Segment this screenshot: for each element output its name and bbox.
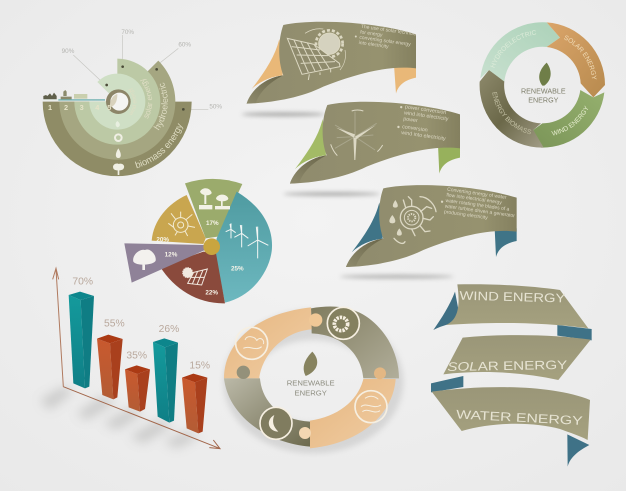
pie labels: 12% xyxy=(165,251,178,258)
fold xyxy=(252,39,283,89)
tip dots xyxy=(105,65,185,111)
bar: 35% xyxy=(125,365,150,412)
centre label xyxy=(287,379,335,398)
ribbon banners xyxy=(431,284,592,467)
centre leaf xyxy=(304,352,317,376)
level numbers and skyline: 1 xyxy=(48,103,52,112)
ring labels: hydroelectric xyxy=(154,82,168,130)
ring labels: biomass energy xyxy=(134,123,184,168)
bar: 26% xyxy=(153,338,178,423)
description text: producing electricity xyxy=(444,209,489,221)
arrow labels: HYDROELECTRIC xyxy=(490,30,536,68)
banner: wind energy xyxy=(433,284,592,340)
segment: purple 12% xyxy=(124,243,206,283)
axes xyxy=(53,268,220,449)
ribbon body xyxy=(290,102,460,184)
bar labels: 35% xyxy=(126,350,147,361)
banner: water energy: WATER ENERGY xyxy=(456,407,583,428)
description text: for energy xyxy=(360,29,383,39)
description text: wind into electricity xyxy=(404,110,449,123)
arrow labels xyxy=(490,30,597,136)
hub xyxy=(203,238,220,255)
shadow xyxy=(242,112,325,116)
icon: top-left badge xyxy=(236,327,268,359)
centre label xyxy=(521,88,566,105)
description text: power conversion xyxy=(404,104,447,116)
piece: top left xyxy=(224,307,312,378)
shadow xyxy=(283,192,380,196)
description text: water turbine driven a generator xyxy=(444,204,515,219)
leader lines and percentages: 70% xyxy=(121,29,134,36)
bar labels: 15% xyxy=(189,361,210,372)
pie labels: 22% xyxy=(205,290,218,297)
bar: 55% xyxy=(97,335,123,399)
ring: solar xyxy=(74,59,160,145)
ring labels xyxy=(128,79,184,168)
bar: 70% xyxy=(69,292,94,388)
banner: water energy xyxy=(432,387,590,467)
icon: wind turbine xyxy=(331,110,383,160)
level numbers and skyline: 5 xyxy=(107,103,111,112)
leader lines and percentages: 90% xyxy=(62,48,75,55)
icon: top-right badge xyxy=(327,307,359,339)
ribbon: solar text xyxy=(242,22,426,116)
circular arrows diagram xyxy=(480,22,605,148)
ribbon: water text xyxy=(340,185,518,279)
banner: wind energy: WIND ENERGY xyxy=(459,289,566,305)
pie labels: 17% xyxy=(206,220,219,227)
description text xyxy=(397,106,448,141)
description text: power xyxy=(403,116,418,124)
bar labels: 26% xyxy=(159,324,179,335)
description text xyxy=(441,187,515,220)
centre label: RENEWABLE xyxy=(521,88,566,96)
description text: Converting energy of water xyxy=(447,187,507,201)
leader lines and percentages: 50% xyxy=(209,104,222,111)
segment: brown 22% xyxy=(160,252,225,303)
arrow: solar energy xyxy=(547,22,605,97)
segment: green 17% xyxy=(185,179,242,238)
centre hub xyxy=(106,89,131,114)
pie chart xyxy=(124,179,272,303)
pie labels: 25% xyxy=(231,266,244,273)
centre label: RENEWABLE xyxy=(287,379,335,388)
description text xyxy=(354,24,416,49)
icon: water wheel xyxy=(389,197,436,243)
ring: biomass xyxy=(43,102,192,176)
ribbon: wind text xyxy=(283,102,460,196)
leader lines and percentages xyxy=(62,29,222,111)
arrow: energy biomass xyxy=(480,70,544,148)
ribbon tail xyxy=(394,65,416,94)
piece: bottom right xyxy=(310,379,396,448)
piece: bottom left xyxy=(224,378,310,447)
shadow xyxy=(340,275,453,279)
ring: hydroelectric xyxy=(59,61,175,160)
arrow labels: SOLAR ENERGY xyxy=(564,36,597,80)
level numbers and skyline xyxy=(43,90,111,112)
level numbers and skyline: 3 xyxy=(80,103,84,112)
ring shadow xyxy=(238,325,388,438)
description text: wind into electricity xyxy=(401,130,446,142)
level numbers and skyline: 4 xyxy=(95,103,100,112)
arrow labels: ENERGY BIOMASS xyxy=(492,92,532,134)
centre leaf xyxy=(539,63,551,86)
ribbon body xyxy=(346,185,517,267)
description text: The use of solar technologies xyxy=(360,24,426,39)
pie labels: 20% xyxy=(156,236,169,243)
piece: top right xyxy=(311,306,399,378)
chart: concentric energy half-rings xyxy=(42,29,222,176)
fold xyxy=(295,119,326,169)
ring icons xyxy=(113,121,124,175)
ribbon tail xyxy=(495,228,517,257)
ribbon body xyxy=(247,22,416,104)
description text: into electricity xyxy=(358,40,389,50)
icons: pie segments xyxy=(133,188,268,285)
ribbon tail xyxy=(438,145,460,174)
centre label: ENERGY xyxy=(294,389,327,398)
banner: solar energy: SOLAR ENERGY xyxy=(447,358,567,374)
description text: converting solar energy xyxy=(359,35,412,48)
bar shadows xyxy=(40,387,200,448)
icon: bottom-left badge xyxy=(260,407,292,439)
segment: yellow 20% xyxy=(152,195,206,244)
segment: teal 25% xyxy=(215,192,272,303)
bar labels xyxy=(72,276,210,372)
bar labels: 55% xyxy=(104,319,125,330)
ring: wind xyxy=(89,74,145,130)
bar labels: 70% xyxy=(72,276,93,287)
leader lines and percentages: 60% xyxy=(178,41,191,48)
pie labels xyxy=(156,220,244,297)
arrow: wind energy xyxy=(533,90,604,148)
3D bar chart xyxy=(40,268,220,449)
centre label: ENERGY xyxy=(528,97,559,105)
arrow: hydroelectric xyxy=(480,22,560,82)
ring labels: wind energy xyxy=(128,88,136,115)
banner: solar energy xyxy=(431,335,591,392)
description text: conversion xyxy=(402,124,428,134)
description text: flow into electrical energy xyxy=(446,192,503,206)
bar: 15% xyxy=(182,374,207,433)
ring labels: solar energy xyxy=(140,79,152,118)
arrow labels: WIND ENERGY xyxy=(551,106,588,136)
level numbers and skyline: 2 xyxy=(64,103,68,112)
puzzle ring diagram xyxy=(224,306,399,448)
puzzle knobs xyxy=(237,313,386,439)
description text: water rotating the blades of a xyxy=(445,198,510,213)
icon: solar panel and sun xyxy=(287,29,346,80)
fold xyxy=(352,202,383,252)
icon: bottom-right badge xyxy=(355,391,387,423)
